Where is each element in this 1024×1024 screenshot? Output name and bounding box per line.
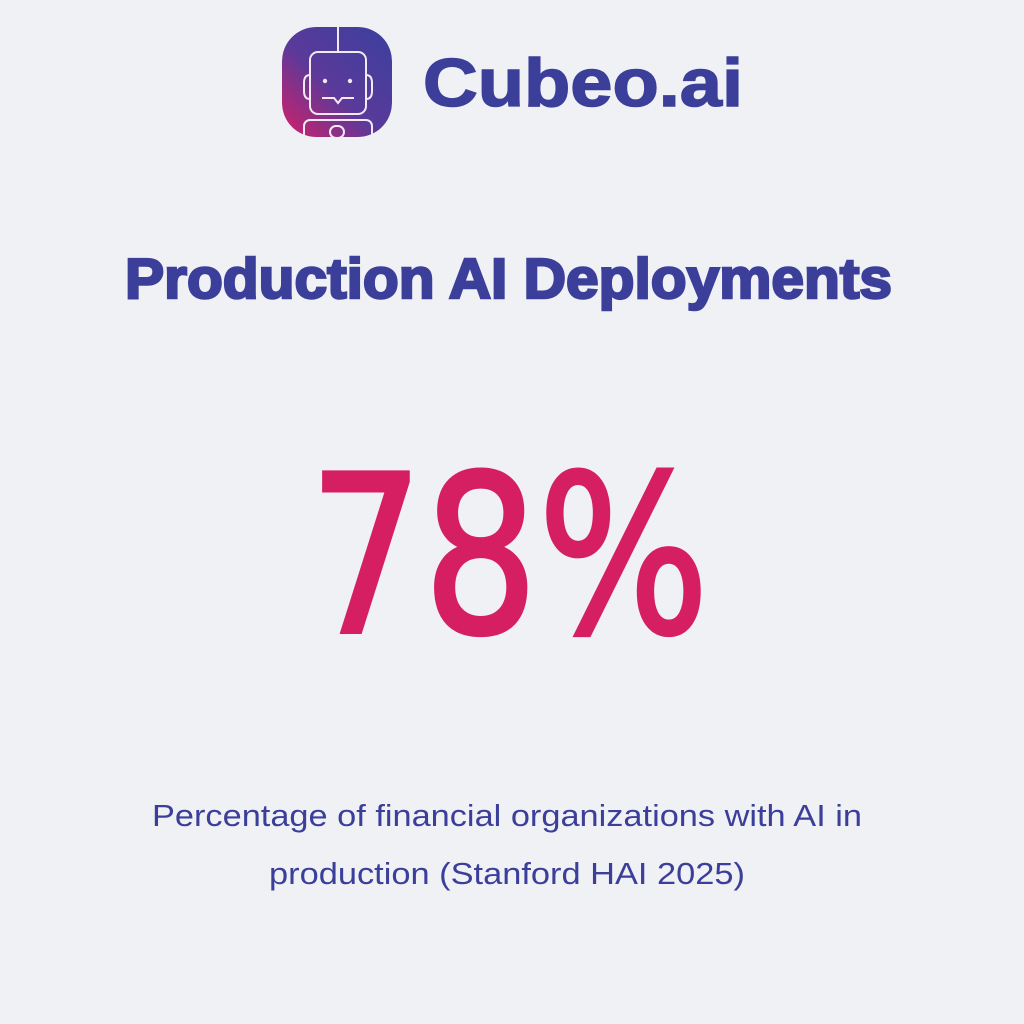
description <box>152 798 862 891</box>
logo text: Cubeo.ai <box>423 45 743 121</box>
description: Percentage of financial organizations with AI in <box>152 798 862 833</box>
description: production (Stanford HAI 2025) <box>269 856 745 891</box>
icon: robot <box>282 27 392 137</box>
logo <box>282 27 739 137</box>
title: Production AI Deployments <box>125 247 892 311</box>
big stat: 78% <box>309 429 709 684</box>
